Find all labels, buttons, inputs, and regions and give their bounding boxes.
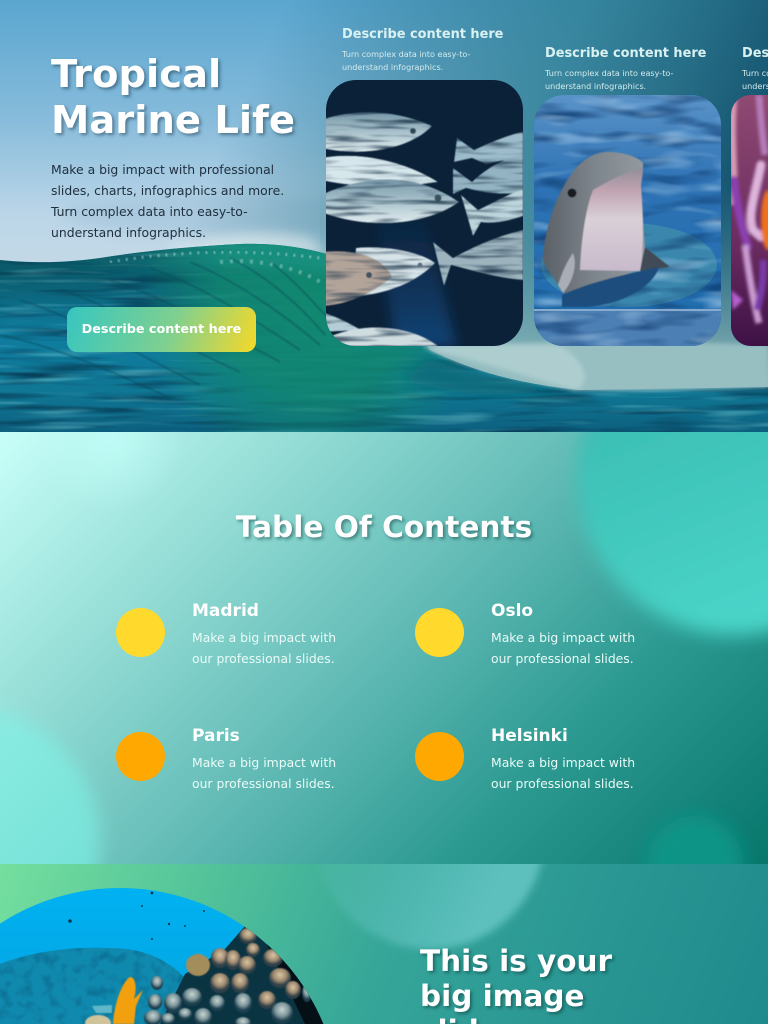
Madrid text: Make a big impact with (192, 630, 336, 645)
Helsinki text (491, 726, 635, 790)
Paris text (192, 726, 336, 790)
photo card: dolphin (534, 95, 721, 346)
card 2 caption: Describe content here (545, 46, 706, 61)
big image heading (420, 944, 616, 1024)
Madrid text: our professional slides. (192, 650, 335, 666)
contents heading: Table Of Contents (236, 510, 532, 544)
item: Paris (116, 726, 336, 790)
hero button (67, 307, 256, 352)
hero title: Marine Life (51, 98, 295, 143)
item: Madrid (116, 601, 336, 666)
card 1 caption (342, 27, 503, 72)
hero ocean wave background (0, 0, 768, 432)
hero title: Tropical (51, 52, 221, 97)
big image section (0, 864, 768, 1024)
item: Oslo (415, 601, 635, 666)
decorative light blob (334, 864, 544, 951)
Oslo text: Make a big impact with (491, 630, 635, 645)
big image heading: big image (420, 979, 584, 1013)
hero description: Make a big impact with professional (51, 162, 274, 177)
decorative background blobs (0, 432, 768, 864)
Helsinki text: Make a big impact with (491, 755, 635, 770)
Helsinki text: Helsinki (491, 726, 568, 746)
card 1 caption: Describe content here (342, 27, 503, 42)
Madrid text (192, 601, 336, 666)
card 3 caption (742, 46, 768, 91)
Helsinki text: our professional slides. (491, 776, 634, 790)
photo card: school of fish (326, 80, 523, 346)
card 2 caption: Turn complex data into easy-to- (545, 68, 673, 78)
card 1 caption: Turn complex data into easy-to- (342, 49, 470, 59)
Paris text: our professional slides. (192, 776, 335, 790)
contents section (0, 432, 768, 864)
hero description: slides, charts, infographics and more. (51, 183, 284, 198)
Oslo text: Oslo (491, 601, 533, 621)
item: Helsinki (415, 726, 635, 790)
hero button: Describe content here (82, 322, 241, 337)
card 2 caption: understand infographics. (545, 81, 646, 91)
photo card: anemone and clownfish (731, 95, 768, 346)
foam (422, 340, 768, 391)
coral reef photo in circle (0, 888, 324, 1024)
big image heading: This is your (420, 944, 612, 978)
card 1 caption: understand infographics. (342, 62, 443, 72)
hero description: understand infographics. (51, 225, 206, 240)
Paris text: Paris (192, 726, 240, 746)
Oslo text: our professional slides. (491, 650, 634, 666)
icon: yellow dot (116, 608, 165, 657)
sea body with green wave face (0, 244, 768, 432)
Oslo text (491, 601, 635, 666)
Madrid text: Madrid (192, 601, 259, 621)
icon: orange dot (415, 732, 464, 781)
Paris text: Make a big impact with (192, 755, 336, 770)
card 2 caption (544, 46, 706, 91)
spray above the wave crest (170, 233, 330, 256)
hero title (51, 52, 297, 143)
icon: yellow dot (415, 608, 464, 657)
icon: orange dot (116, 732, 165, 781)
hero description: Turn complex data into easy-to- (51, 204, 248, 219)
hero section (0, 0, 768, 432)
hero description (50, 162, 284, 240)
